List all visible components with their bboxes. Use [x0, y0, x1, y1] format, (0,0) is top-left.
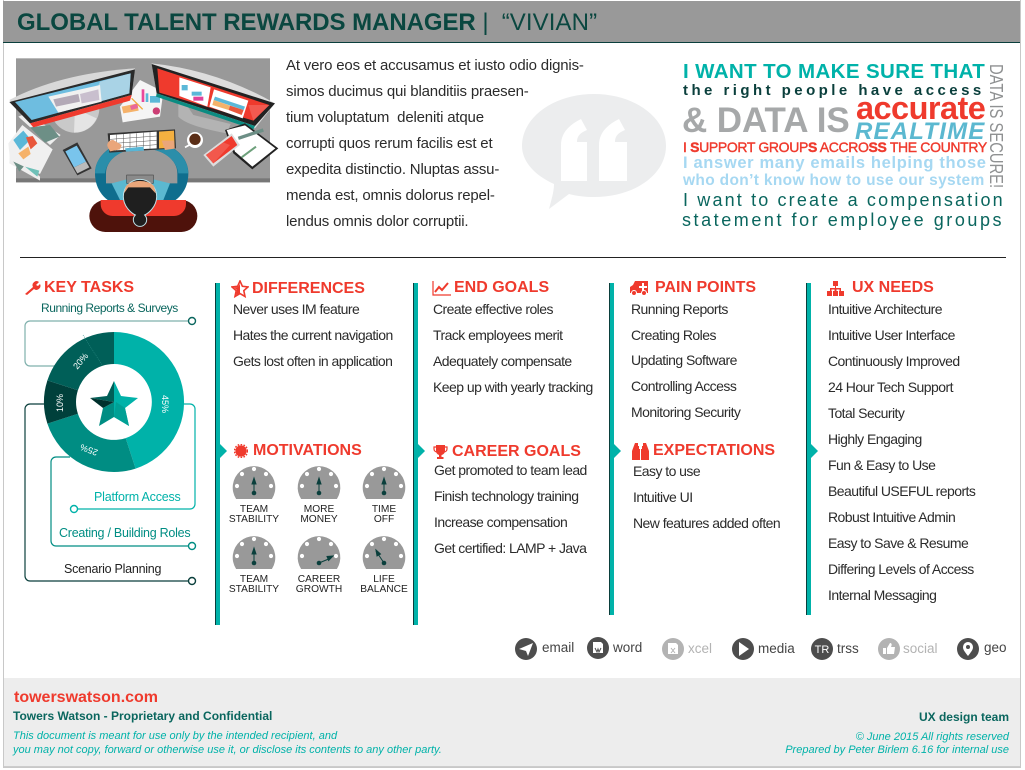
heading: pain points: PAIN POINTS	[655, 279, 756, 296]
panel: motivations: GROWTH	[296, 584, 342, 595]
intro paragraph: tium voluptatum deleniti atque	[286, 109, 484, 126]
legend: output formats: media	[758, 641, 795, 656]
panel: motivations: MORE	[304, 504, 334, 515]
panel: pain points	[630, 279, 756, 420]
intro paragraph	[286, 57, 584, 230]
word cloud quote: the right people have access	[683, 82, 985, 99]
panel: differences	[231, 280, 393, 369]
team credit: UX design team	[919, 710, 1009, 724]
panel: motivations: STABILITY	[229, 514, 279, 525]
label: running reports: Running Reports & Surveys	[41, 301, 178, 315]
panel: ux needs: Beautiful USEFUL reports	[828, 483, 975, 499]
donut chart: 20%	[71, 351, 90, 371]
legend: output formats: geo	[984, 640, 1007, 655]
panel: expectations: New features added often	[633, 515, 780, 531]
panel: key tasks	[24, 279, 196, 586]
panel: end goals: Create effective roles	[433, 301, 553, 317]
panel: motivations: LIFE	[373, 574, 395, 585]
panel: ux needs	[827, 279, 976, 603]
panel: expectations: Easy to use	[633, 463, 700, 479]
header bar	[3, 1, 1020, 43]
word cloud quote: DATA IS SECURE!	[986, 64, 1006, 188]
panel: ux needs: Fun & Easy to Use	[828, 457, 935, 473]
panel: end goals: Adequately compensate	[433, 353, 572, 369]
panel: pain points: Creating Roles	[631, 327, 716, 343]
word cloud quote: I SUPPORT GROUPS ACCROSS THE COUNTRY	[683, 139, 987, 155]
label: scenario planning: Scenario Planning	[64, 562, 161, 576]
panel: motivations: TEAM	[240, 504, 268, 515]
legend: output formats: email	[542, 640, 574, 655]
panel: end goals	[432, 279, 593, 395]
copyright	[785, 730, 1010, 756]
heading: key tasks: KEY TASKS	[44, 279, 134, 296]
heading: ux needs: UX NEEDS	[852, 279, 934, 296]
panel: ux needs: Robust Intuitive Admin	[828, 509, 955, 525]
intro paragraph: corrupti quos rerum facilis est et	[286, 135, 492, 152]
panel: motivations	[229, 442, 408, 595]
legend: output formats: word	[613, 640, 642, 655]
label: creating roles: Creating / Building Roles	[59, 526, 190, 540]
panel: pain points: Running Reports	[631, 301, 728, 317]
donut chart: 25%	[79, 442, 99, 458]
footer	[4, 678, 1020, 767]
disclaimer: you may not copy, forward or otherwise use it, or disclose its contents to any other party.	[13, 744, 442, 756]
intro paragraph: lendus omnis dolor corruptii.	[286, 213, 468, 230]
panel: ux needs: Highly Engaging	[828, 431, 922, 447]
panel: ux needs: Total Security	[828, 405, 904, 421]
illustration: person at desk	[8, 58, 278, 232]
footer brand: towerswatson.com	[14, 689, 158, 706]
confidentiality heading: Towers Watson - Proprietary and Confidential	[13, 709, 272, 723]
word cloud quote: accurate	[856, 90, 985, 126]
word cloud quote: I answer many emails helping those	[683, 154, 987, 172]
heading: motivations: MOTIVATIONS	[253, 442, 362, 459]
word cloud quote: who don’t know how to use our system	[683, 172, 985, 189]
column rule 1	[215, 283, 220, 625]
panel: ux needs: Continuously Improved	[828, 353, 960, 369]
word cloud quote: I WANT TO MAKE SURE THAT	[683, 60, 985, 83]
panel: career goals	[433, 443, 587, 556]
intro paragraph: menda est, omnis dolorus repel-	[286, 187, 495, 204]
panel: career goals: Get promoted to team lead	[434, 462, 587, 478]
panel: ux needs: 24 Hour Tech Support	[828, 379, 953, 395]
intro paragraph: At vero eos et accusamus et iusto odio dignis-	[286, 57, 584, 74]
donut chart: 45%	[160, 395, 170, 413]
heading: end goals: END GOALS	[454, 279, 549, 296]
gauges	[232, 466, 406, 569]
panel: pain points: Monitoring Security	[631, 404, 740, 420]
heading: career goals: CAREER GOALS	[452, 443, 581, 460]
panel: differences: Hates the current navigation	[233, 327, 393, 343]
word cloud quote: & DATA IS	[682, 101, 850, 140]
intro paragraph: simos ducimus qui blanditiis praesen-	[286, 83, 529, 100]
panel: pain points: Controlling Access	[631, 378, 736, 394]
panel: motivations: MONEY	[300, 514, 338, 525]
panel: differences: Gets lost often in application	[233, 353, 392, 369]
intro paragraph: expedita distinctio. Nluptas assu-	[286, 161, 499, 178]
disclaimer	[12, 730, 442, 756]
label: platform access: Platform Access	[94, 490, 181, 504]
arrow 4	[811, 444, 818, 458]
legend: output formats: TR	[815, 644, 829, 656]
copyright: © June 2015 All rights reserved	[856, 730, 1009, 742]
panel: ux needs: Internal Messaging	[828, 587, 936, 603]
column rule 3	[609, 283, 614, 615]
panel: expectations	[632, 442, 780, 531]
panel: motivations: OFF	[374, 514, 394, 525]
panel: motivations: TEAM	[240, 574, 268, 585]
panel: ux needs: Easy to Save & Resume	[828, 535, 968, 551]
panel: ux needs: Differing Levels of Access	[828, 561, 974, 577]
word cloud quote: REALTIME	[855, 118, 985, 145]
legend: output formats: social	[903, 641, 938, 656]
word cloud quote	[682, 60, 1006, 230]
panel: career goals: Get certified: LAMP + Java	[434, 540, 586, 556]
arrow 2	[418, 444, 425, 458]
panel: career goals: Finish technology training	[434, 488, 578, 504]
panel: pain points: Updating Software	[631, 352, 737, 368]
icon: quote speech bubble	[522, 94, 666, 209]
panel: motivations: CAREER	[298, 574, 340, 585]
legend: output formats	[515, 637, 1007, 660]
legend: output formats: trss	[837, 641, 859, 656]
panel: end goals: Keep up with yearly tracking	[433, 379, 593, 395]
panel: expectations: Intuitive UI	[633, 489, 693, 505]
copyright: Prepared by Peter Birlem 6.16 for internal use	[785, 744, 1009, 756]
arrow 1	[220, 444, 227, 458]
panel: ux needs: Intuitive User Interface	[828, 327, 955, 343]
word cloud quote: I want to create a compensation	[683, 190, 1005, 210]
panel: differences: Never uses IM feature	[233, 301, 359, 317]
panel: motivations: STABILITY	[229, 584, 279, 595]
panel: career goals: Increase compensation	[434, 514, 567, 530]
column rule 2	[413, 283, 418, 625]
donut chart	[24, 316, 196, 586]
donut chart: 10%	[55, 394, 65, 412]
panel: motivations: TIME	[372, 504, 396, 515]
heading: expectations: EXPECTATIONS	[653, 442, 775, 459]
legend: output formats: xcel	[688, 641, 712, 656]
panel: end goals: Track employees merit	[433, 327, 563, 343]
title: GLOBAL TALENT REWARDS MANAGER | “VIVIAN”	[17, 9, 597, 36]
heading: differences: DIFFERENCES	[252, 280, 365, 297]
column rule 4	[806, 283, 811, 615]
disclaimer: This document is meant for use only by the intended recipient, and	[13, 730, 337, 742]
arrow 3	[614, 444, 621, 458]
word cloud quote: statement for employee groups	[682, 210, 1004, 230]
divider	[20, 257, 1006, 258]
panel: motivations: BALANCE	[360, 584, 408, 595]
panel: ux needs: Intuitive Architecture	[828, 301, 942, 317]
